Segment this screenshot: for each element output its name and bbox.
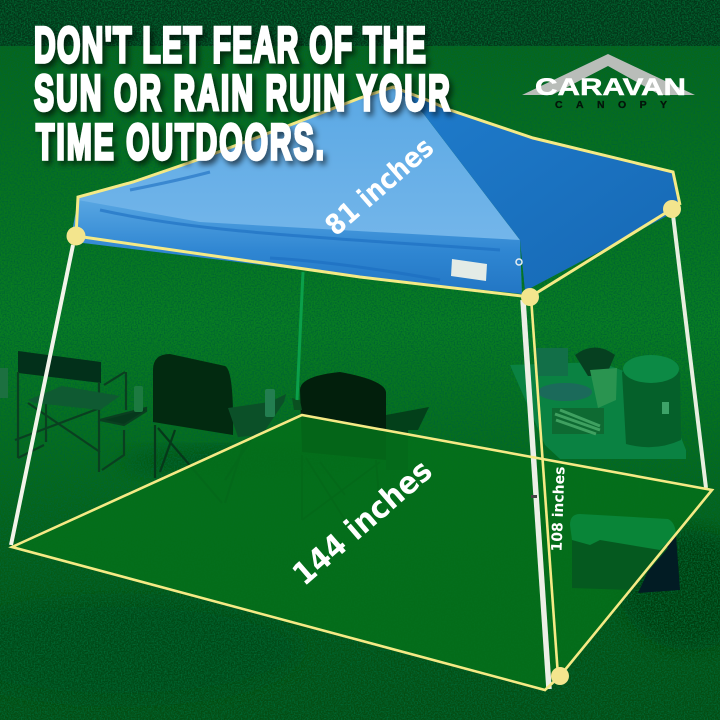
title: SUN OR RAIN RUIN YOUR (34, 65, 450, 121)
panel: canopy roof (72, 88, 680, 294)
poles: left and front (11, 245, 549, 689)
bottle 2 (265, 389, 275, 417)
label: 108 inches: 108 inches (550, 466, 568, 552)
right roof panel (395, 88, 680, 291)
corner markers (66, 200, 681, 685)
label: 81 inches: 81 inches (319, 131, 440, 242)
title (34, 17, 450, 170)
logo: Caravan Canopy (522, 54, 695, 111)
logo wordmark: CARAVAN (535, 74, 686, 101)
small bottle left edge (0, 368, 8, 398)
scene: food table and drink cooler (510, 348, 686, 510)
outline: canopy measurements (76, 87, 680, 297)
chair 1 (15, 351, 146, 472)
bottle 1 (134, 386, 143, 412)
back-right pole (673, 215, 706, 488)
grommet (516, 259, 522, 265)
center back pole (297, 272, 303, 400)
scene: folding chairs behind canopy (0, 351, 429, 520)
canopy tag (451, 259, 487, 281)
label: 144 inches: 144 inches (286, 453, 439, 593)
chair 2 (153, 354, 286, 503)
front roof panel (78, 88, 520, 245)
chair 3 (292, 372, 429, 520)
scene: ice chest (570, 514, 680, 593)
panel: floor footprint (12, 415, 712, 690)
title: TIME OUTDOORS. (36, 114, 324, 170)
title: DON'T LET FEAR OF THE (34, 17, 426, 73)
logo roof (522, 54, 695, 95)
logo subline: CANOPY (555, 99, 667, 111)
outline: floor and height guide (12, 297, 712, 690)
front valance (72, 200, 522, 294)
